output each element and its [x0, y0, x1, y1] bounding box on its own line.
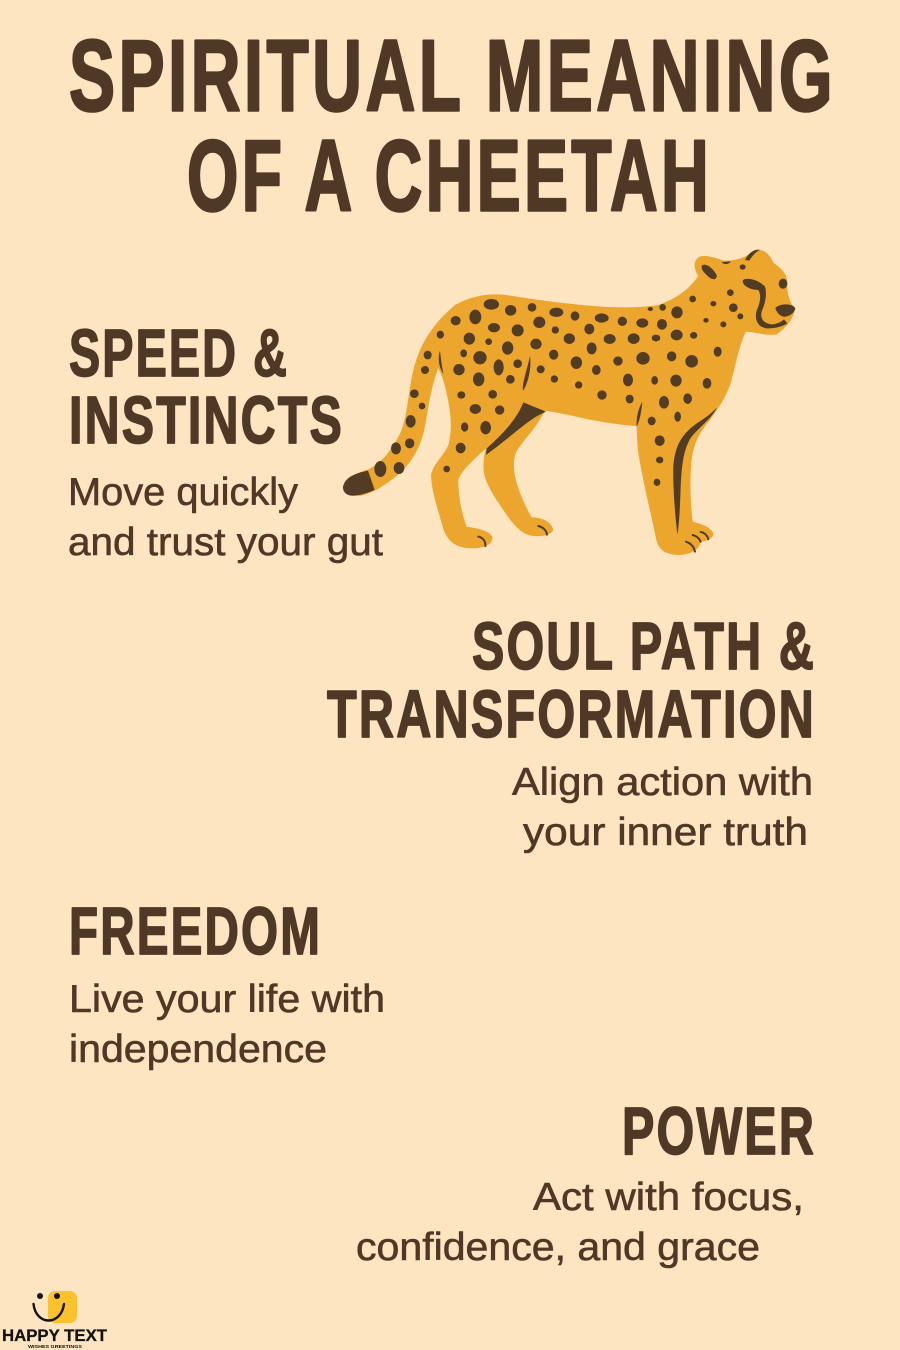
section: freedom — [69, 894, 385, 1071]
heading: power: POWER — [622, 1094, 816, 1169]
heading: speed and instincts — [69, 316, 344, 458]
text: soul path description: Align action with — [512, 761, 813, 804]
cheetah spots — [374, 264, 787, 486]
heading: speed and instincts: SPEED & — [69, 316, 289, 391]
illustration: cheetah — [343, 250, 795, 555]
text: freedom description — [69, 978, 385, 1071]
heading: freedom: FREEDOM — [69, 894, 322, 969]
text: freedom description: Live your life with — [69, 978, 385, 1021]
tail tip — [343, 471, 375, 496]
cheetah body — [343, 250, 795, 555]
section: speed and instincts — [68, 316, 383, 564]
text: speed and instincts description: Move quickly — [68, 471, 298, 514]
logo wordmark: HAPPY TEXT — [2, 1326, 108, 1345]
text: freedom description: independence — [69, 1028, 327, 1071]
text: power description: confidence, and grace — [356, 1226, 760, 1269]
text: soul path description: your inner truth — [523, 811, 808, 854]
cheetah toes — [478, 526, 708, 552]
text: speed and instincts description — [68, 471, 383, 564]
text: speed and instincts description: and trust your gut — [68, 521, 383, 564]
text: soul path description — [512, 761, 813, 854]
section: power — [356, 1094, 816, 1269]
heading: soul path and transformation — [327, 609, 816, 752]
title — [69, 20, 836, 232]
logo tagline: WISHES GREETINGS — [28, 1344, 82, 1349]
text: power description — [356, 1176, 804, 1269]
icon: smiley — [34, 1291, 77, 1323]
section: soul path and transformation — [327, 609, 816, 854]
dark leg and body markings — [439, 250, 795, 535]
text: power description: Act with focus, — [533, 1176, 804, 1219]
logo: happy text — [2, 1291, 108, 1349]
heading: speed and instincts: INSTINCTS — [69, 383, 344, 458]
